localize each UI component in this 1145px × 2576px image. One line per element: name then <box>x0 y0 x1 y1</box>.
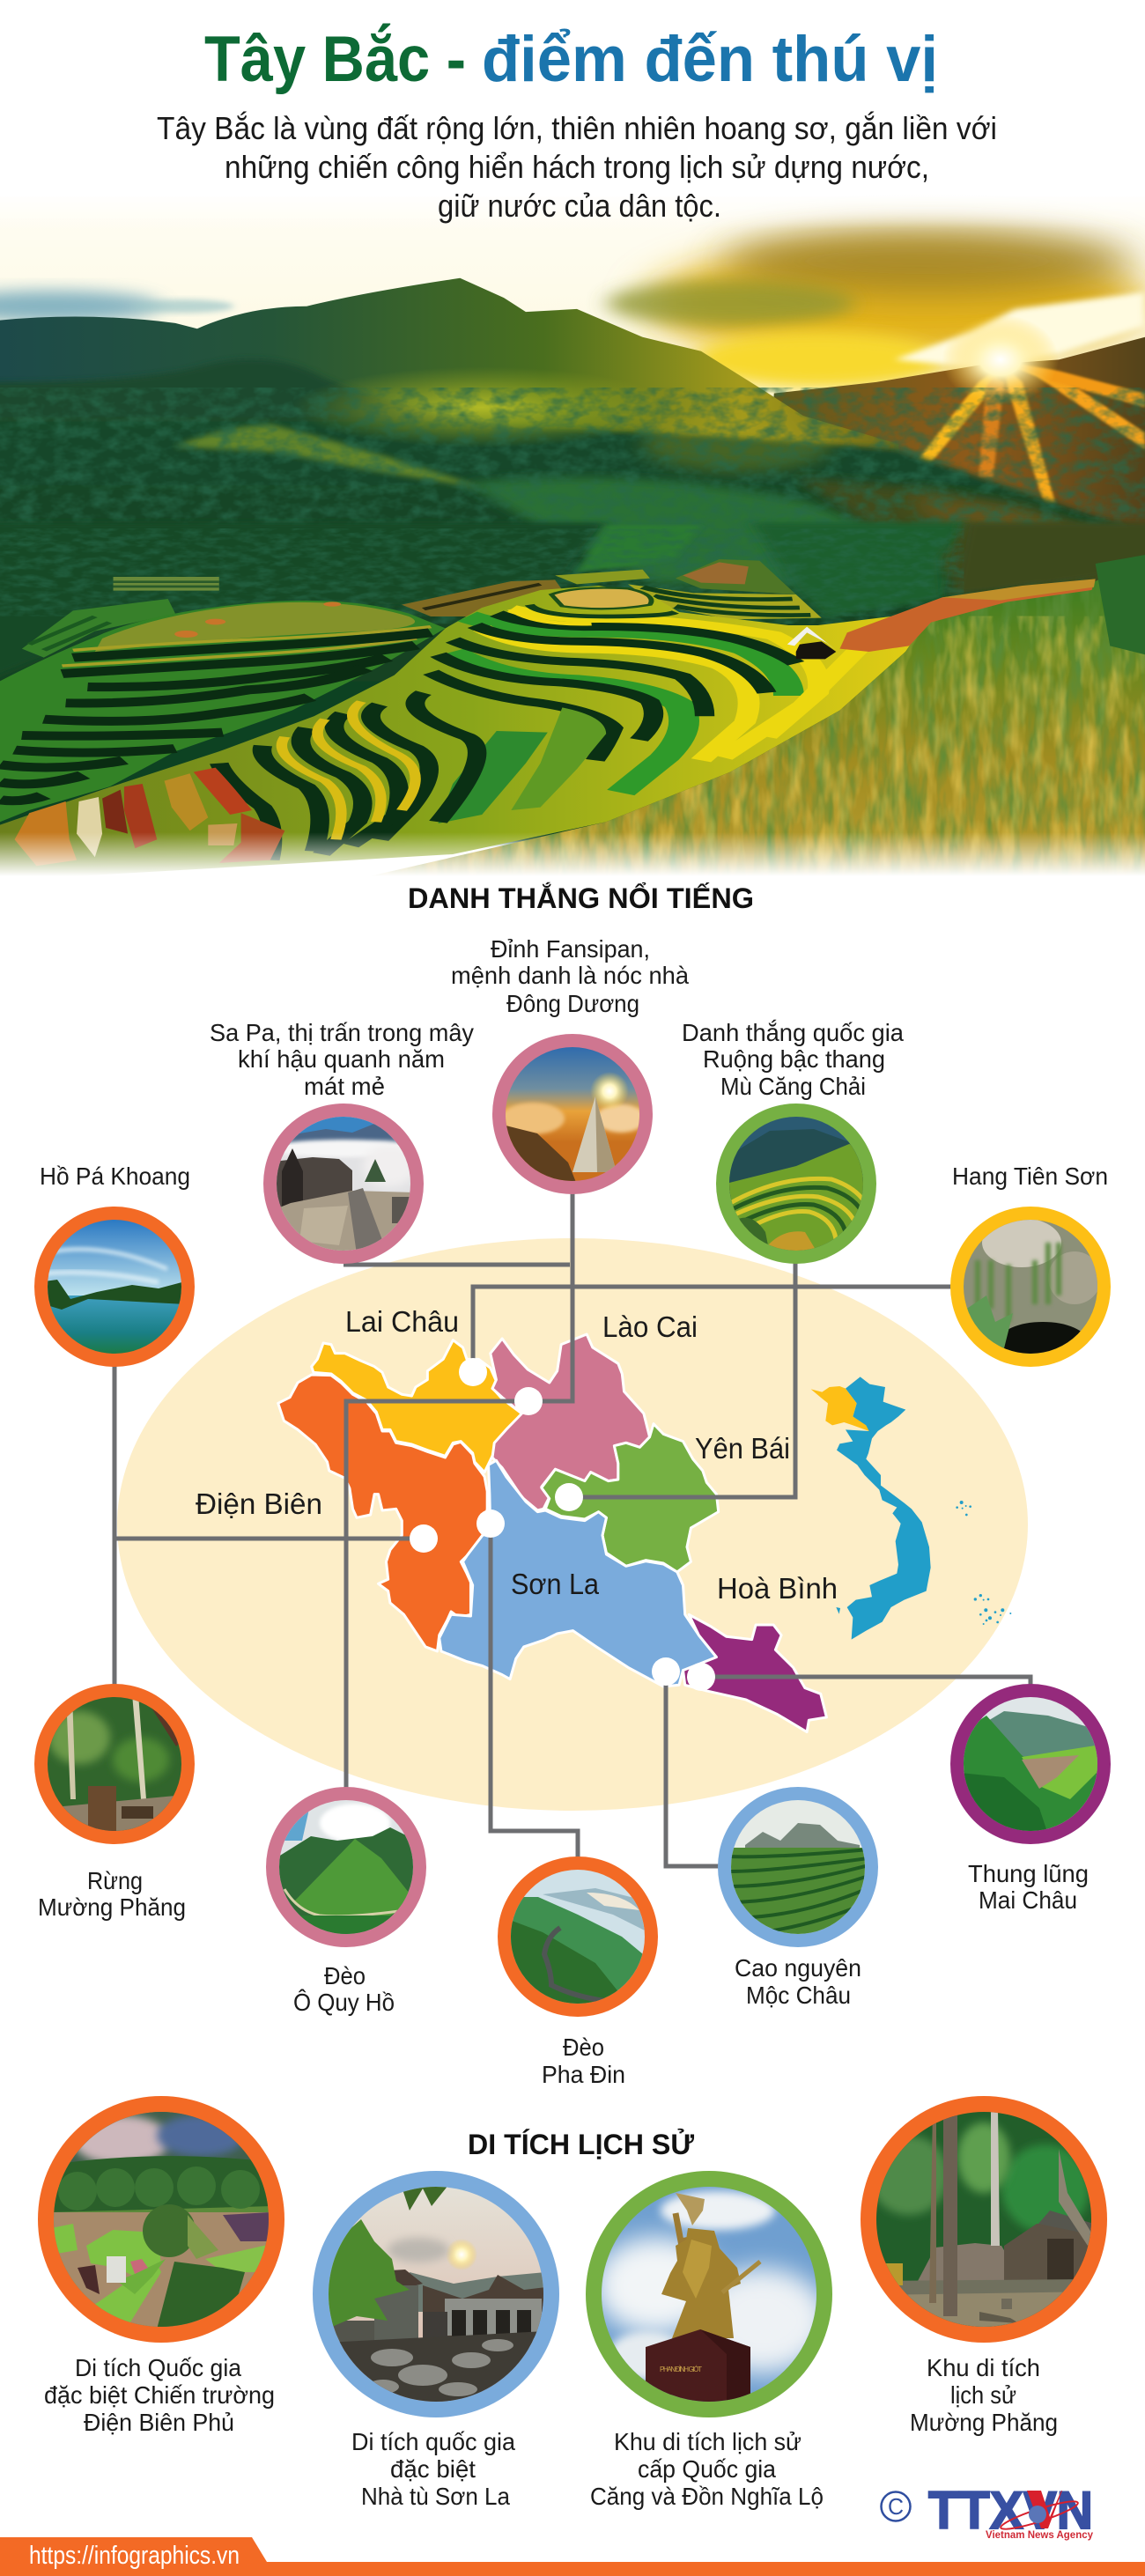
landscape captions: Mù Căng Chải <box>720 1073 866 1100</box>
province labels: Điện Biên <box>196 1487 322 1520</box>
province labels: Sơn La <box>511 1568 600 1600</box>
historic site captions: Khu di tích lịch sử <box>614 2428 802 2455</box>
photo circle: Thung lũng Mai Châu <box>950 1684 1111 1844</box>
historic site captions: đặc biệt Chiến trường <box>44 2381 275 2409</box>
heading: historic sites: DI TÍCH LỊCH SỬ <box>468 2129 694 2160</box>
region: Lào Cai <box>491 1334 650 1510</box>
title: Tây Bắc - <box>204 24 466 95</box>
landscape captions: mệnh danh là nóc nhà <box>451 962 689 989</box>
hero lower: rice terraces <box>0 522 1145 881</box>
footer bar with url: https://infographics.vn <box>29 2542 240 2570</box>
historic site captions: Nhà tù Sơn La <box>361 2483 510 2510</box>
landscape captions: Đông Dương <box>506 990 639 1017</box>
photo circle: Nhà tù Sơn La <box>313 2171 559 2417</box>
title <box>204 24 938 95</box>
golden rice slope <box>385 579 1145 875</box>
photo circle: Rừng Mường Phăng <box>34 1684 195 1844</box>
intro text: những chiến công hiển hách trong lịch sử dựng nước, <box>225 149 929 185</box>
photo circle: Đèo Pha Đin <box>498 1856 658 2017</box>
photo circle: Hồ Pá Khoang <box>34 1207 195 1367</box>
region: Yên Bái <box>542 1424 719 1572</box>
photo circle: Đèo Ô Quy Hồ <box>266 1787 426 1947</box>
historic site captions: Di tích quốc gia <box>351 2428 515 2455</box>
landscape captions: Sa Pa, thị trấn trong mây <box>210 1019 474 1046</box>
landscape captions: Mai Châu <box>979 1886 1077 1914</box>
photo circle: Mù Căng Chải <box>716 1103 876 1264</box>
heading: famous landscapes: DANH THẮNG NỔI TIẾNG <box>408 882 754 914</box>
photo fade edges <box>0 189 1145 876</box>
landscape captions: Hồ Pá Khoang <box>40 1163 190 1190</box>
landscape captions: Thung lũng <box>968 1860 1089 1887</box>
landscape captions: Đèo <box>563 2033 604 2061</box>
landscape captions: Rừng <box>87 1867 143 1894</box>
province labels: Hoà Bình <box>717 1572 838 1605</box>
footer bar with url <box>0 2537 1145 2576</box>
title: điểm đến thú vị <box>482 24 938 95</box>
map background ellipse <box>117 1238 1028 1811</box>
province labels: Lai Châu <box>345 1305 459 1338</box>
historic site captions: Căng và Đồn Nghĩa Lộ <box>590 2483 824 2510</box>
landscape captions: Đèo <box>324 1962 366 1989</box>
hero photo: mountains and rice terraces at sunset <box>0 196 1145 881</box>
historic site captions: cấp Quốc gia <box>638 2455 776 2483</box>
landscape captions: Pha Đin <box>542 2061 625 2088</box>
photo circle: Căng và Đồn Nghĩa Lộ: PHAN ĐÌNH GIÓT <box>660 2366 702 2373</box>
region: Lai Châu <box>312 1340 521 1473</box>
historic site captions: lịch sử <box>950 2381 1016 2409</box>
landscape captions: Ô Quy Hồ <box>293 1989 395 2016</box>
logo: TTXVN: C <box>888 2493 904 2520</box>
region: Hoà Bình <box>683 1614 826 1732</box>
main terrace <box>0 586 942 881</box>
province labels: Yên Bái <box>695 1432 790 1465</box>
landscape captions: Ruộng bậc thang <box>703 1045 885 1073</box>
back terraces <box>114 577 219 591</box>
photo circle: Fansipan <box>492 1034 653 1194</box>
intro text <box>157 110 997 224</box>
photo circle: Hang Tiên Sơn <box>950 1207 1111 1367</box>
landscape captions: Mường Phăng <box>38 1893 186 1921</box>
region: Sơn La <box>440 1460 716 1687</box>
landscape captions: Mộc Châu <box>746 1982 851 2009</box>
landscape captions: Hang Tiên Sơn <box>952 1163 1108 1190</box>
landscape captions: Cao nguyên <box>735 1954 861 1982</box>
intro text: giữ nước của dân tộc. <box>438 188 721 224</box>
landscape captions: khí hậu quanh năm <box>238 1045 445 1073</box>
province labels <box>196 1305 838 1605</box>
historic site captions: Mường Phăng <box>910 2409 1058 2436</box>
connector lines <box>114 1189 1030 1866</box>
map: northwest provinces <box>278 1334 826 1732</box>
terrace cap <box>551 587 652 609</box>
historic site captions: Di tích Quốc gia <box>75 2354 241 2381</box>
logo: TTXVN: TTXVN <box>928 2481 1093 2540</box>
historic site captions <box>44 2354 1058 2510</box>
landscape captions <box>38 935 1108 2088</box>
intro text: Tây Bắc là vùng đất rộng lớn, thiên nhiên hoang sơ, gắn liền với <box>157 110 997 146</box>
landscape captions: mát mẻ <box>304 1073 385 1100</box>
region: Điện Biên <box>278 1375 487 1651</box>
photo circle: Căng và Đồn Nghĩa Lộ <box>586 2171 832 2417</box>
photo circle: Chiến trường Điện Biên Phủ <box>38 2096 284 2343</box>
landscape captions: Danh thắng quốc gia <box>682 1019 904 1046</box>
historic site captions: Khu di tích <box>927 2354 1040 2381</box>
province labels: Lào Cai <box>602 1310 698 1343</box>
photo circle: Khu di tích Mường Phăng <box>861 2096 1107 2343</box>
photo circle: Cao nguyên Mộc Châu <box>718 1787 878 1947</box>
map location dots <box>410 1358 715 1691</box>
logo: TTXVN: Vietnam News Agency <box>986 2528 1093 2541</box>
landscape captions: Đỉnh Fansipan, <box>491 935 650 963</box>
historic site captions: đặc biệt <box>390 2455 476 2483</box>
red and cream terraces bottom-left <box>194 768 252 815</box>
photo circle: Sa Pa <box>263 1103 424 1264</box>
inset map: Vietnam <box>811 1377 1011 1640</box>
hut <box>796 641 836 659</box>
historic site captions: Điện Biên Phủ <box>84 2409 234 2436</box>
hero upper: sky, sun and forested mountains <box>0 196 1145 843</box>
left terrace mound <box>0 601 446 822</box>
